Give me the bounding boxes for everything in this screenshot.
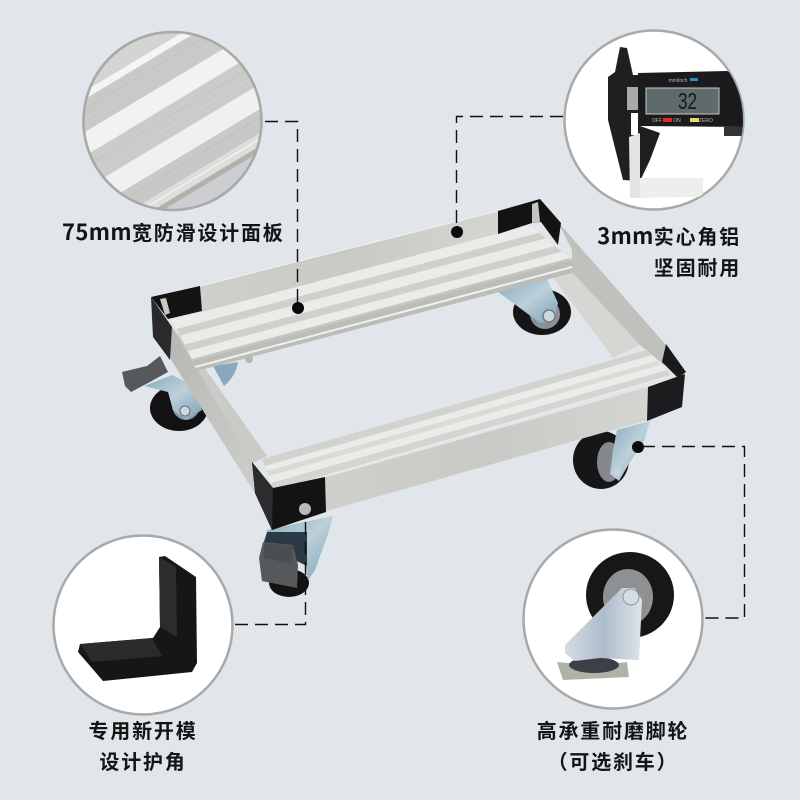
LCD display: 32 xyxy=(678,88,697,114)
leader line: caster xyxy=(632,441,744,618)
caster: front left with brake xyxy=(259,516,333,597)
caliper body xyxy=(608,47,746,181)
label: corner guard xyxy=(88,715,198,775)
label: panel: 75mm宽防滑设计面板 xyxy=(62,215,285,247)
circle: caster wheel close-up xyxy=(524,530,702,708)
front wall rail xyxy=(323,387,648,512)
leader line: angle aluminium xyxy=(451,116,563,238)
back panel: ribbed top xyxy=(172,225,572,371)
caliper labels: mm/inch xyxy=(669,78,688,84)
label: angle aluminium xyxy=(597,219,741,281)
right side rail xyxy=(558,222,666,365)
left side rail xyxy=(170,327,267,492)
label: angle aluminium: 坚固耐用 xyxy=(654,252,741,281)
icon: black corner guard xyxy=(78,556,197,681)
product: aluminium caster dolly xyxy=(122,199,686,597)
label: corner guard: 专用新开模 xyxy=(88,715,198,744)
caster: front right xyxy=(573,421,650,489)
label: angle aluminium: 3mm实心角铝 xyxy=(597,219,741,251)
corner bracket: back right xyxy=(498,199,561,245)
angle aluminium sample xyxy=(629,133,703,198)
circle: anti-slip panel close-up xyxy=(82,30,263,212)
caster: back right xyxy=(498,279,571,335)
leader line: panel xyxy=(265,122,304,314)
back wall rail xyxy=(200,211,498,312)
caliper labels xyxy=(652,78,713,124)
label: caster: （可选刹车） xyxy=(548,746,678,775)
caster: back left with brake xyxy=(122,355,253,431)
circle: corner guard close-up xyxy=(54,536,232,714)
corner bracket: back left xyxy=(151,286,202,360)
front panel: ribbed top xyxy=(262,350,672,491)
leader line: corner guard xyxy=(235,503,311,624)
label: caster: 高承重耐磨脚轮 xyxy=(537,715,689,744)
caliper labels: OFF xyxy=(652,118,662,124)
label: corner guard: 设计护角 xyxy=(99,746,187,775)
caliper labels: ZERO xyxy=(699,118,713,124)
circle: caliper measuring 3mm angle aluminium xyxy=(564,30,746,210)
label: caster xyxy=(537,715,689,775)
corner bracket: front right xyxy=(647,344,686,421)
stripes: ribbed aluminium xyxy=(84,34,260,209)
corner bracket: front left xyxy=(252,462,326,530)
LCD display xyxy=(646,88,719,114)
icon: caster wheel xyxy=(557,552,674,680)
caliper labels: ON xyxy=(673,118,681,124)
